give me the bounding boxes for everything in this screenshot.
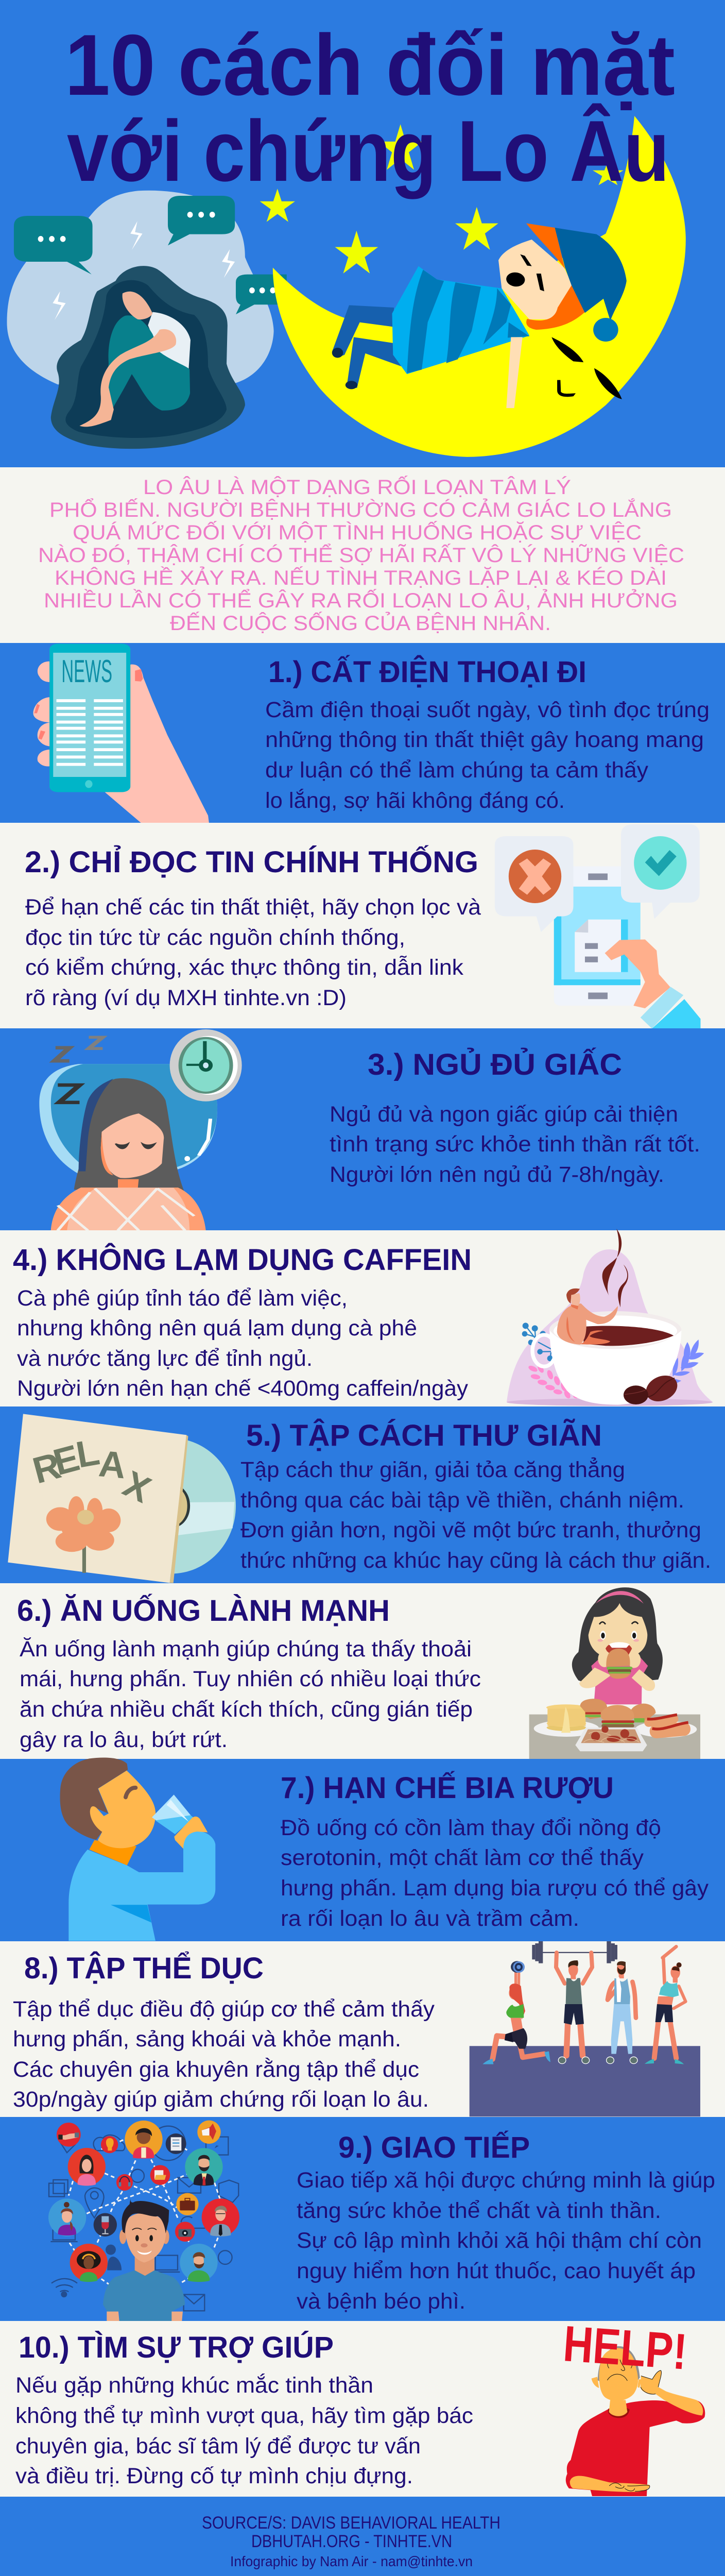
panel: footer sources [0, 2497, 725, 2576]
icon: relax album with disc [8, 1414, 236, 1583]
panel: introduction: PHỔ BIẾN. NGƯỜI BỆNH THƯỜNG CÓ CẢM GIÁC LO LẮNG [49, 497, 672, 521]
body text [15, 2373, 473, 2488]
body text: tăng sức khỏe thể chất và tinh thần. [297, 2198, 661, 2223]
icon: girl eating burgers [529, 1587, 700, 1759]
heading: 2.) CHỈ ĐỌC TIN CHÍNH THỐNG [25, 845, 478, 879]
body text: Tập thể dục điều độ giúp cơ thể cảm thấy [13, 1997, 435, 2022]
icon: relax album with disc: RELAX [28, 1431, 157, 1511]
body text [330, 1102, 700, 1187]
icon: man drinking water [60, 1757, 215, 1941]
illustration: anxious woman with speech bubbles [7, 191, 287, 449]
body text: Ngủ đủ và ngon giấc giúp cải thiện [330, 1102, 678, 1127]
body text: Tập cách thư giãn, giải tỏa căng thẳng [240, 1457, 625, 1482]
icon: man asking for help [562, 2315, 705, 2496]
icon: hand holding phone with news [33, 644, 209, 823]
body text [17, 1286, 468, 1401]
panel: introduction: LO ÂU LÀ MỘT DẠNG RỐI LOẠN TÂM LÝ [143, 475, 571, 499]
body text: không thể tự mình vượt qua, hãy tìm gặp bác [15, 2403, 473, 2428]
body text: nhưng không nên quá lạm dụng cà phê [17, 1316, 417, 1341]
text: sources: SOURCE/S: DAVIS BEHAVIORAL HEALTH [202, 2513, 500, 2533]
body text: Cà phê giúp tỉnh táo để làm việc, [17, 1286, 348, 1311]
body text: thông qua các bài tập về thiền, chánh niệm. [240, 1488, 684, 1513]
body text: Đồ uống có cồn làm thay đổi nồng độ [281, 1816, 661, 1840]
text: credit: Infographic by Nam Air - nam@tinhte.vn [230, 2553, 473, 2569]
panel: introduction: QUÁ MỨC ĐỐI VỚI MỘT TÌNH HUỐNG HOẶC SỰ VIỆC [73, 520, 642, 544]
body text: hưng phấn, sảng khoái và khỏe mạnh. [13, 2027, 401, 2052]
panel: tip 1 [0, 643, 725, 823]
panel: tip 3 [0, 1028, 725, 1230]
body text: Người lớn nên hạn chế <400mg caffein/ngày [17, 1376, 468, 1401]
title [65, 16, 675, 199]
body text: hưng phấn. Lạm dụng bia rượu có thể gây [281, 1876, 709, 1901]
panel: tip 10 [0, 2315, 725, 2497]
body text: nguy hiểm hơn hút thuốc, cao huyết áp [297, 2259, 696, 2283]
body text: những thông tin thất thiệt gây hoang mang [265, 727, 704, 752]
body text: gây ra lo âu, bứt rứt. [20, 1727, 228, 1752]
icon: network of people around a man [48, 2121, 239, 2321]
icon: sleeping woman with clock [39, 1029, 242, 1230]
body text: tình trạng sức khỏe tinh thần rất tốt. [330, 1132, 700, 1157]
text: source links: DBHUTAH.ORG - TINHTE.VN [251, 2532, 452, 2551]
body text: Các chuyên gia khuyên rằng tập thể dục [13, 2057, 419, 2082]
body text: Nếu gặp những khúc mắc tinh thần [15, 2373, 373, 2398]
body text: Để hạn chế các tin thất thiệt, hãy chọn lọc và [25, 895, 481, 920]
body text: và nước tăng lực để tỉnh ngủ. [17, 1346, 313, 1371]
panel: introduction: KHÔNG HỀ XẢY RA. NẾU TÌNH TRẠNG LẶP LẠI & KÉO DÀI [55, 566, 667, 589]
panel: introduction: ĐẾN CUỘC SỐNG CỦA BỆNH NHÂN. [170, 611, 551, 635]
heading: 8.) TẬP THỂ DỤC [24, 1952, 264, 1985]
body text: Giao tiếp xã hội được chứng minh là giúp [297, 2168, 715, 2193]
panel: tip 2 [0, 823, 725, 1028]
panel: tip 5 [0, 1406, 725, 1583]
body text: lo lắng, sợ hãi không đáng có. [265, 788, 565, 813]
body text: Đơn giản hơn, ngồi vẽ một bức tranh, thưởng [240, 1518, 701, 1543]
body text: và bệnh béo phì. [297, 2289, 465, 2314]
body text [240, 1457, 711, 1573]
body text: có kiểm chứng, xác thực thông tin, dẫn link [25, 955, 464, 980]
body text [281, 1816, 709, 1931]
body text: chuyên gia, bác sĩ tâm lý để được tư vấn [15, 2434, 421, 2459]
illustration: boy sleeping on a crescent moon [273, 116, 686, 457]
panel: tip 8 [0, 1941, 725, 2117]
panel: hero header [0, 0, 725, 467]
heading: 3.) NGỦ ĐỦ GIẤC [368, 1048, 622, 1081]
body text: dư luận có thể làm chúng ta cảm thấy [265, 758, 649, 783]
body text [25, 895, 481, 1010]
heading: 9.) GIAO TIẾP [338, 2131, 530, 2164]
heading: 7.) HẠN CHẾ BIA RƯỢU [281, 1771, 614, 1805]
title: 10 cách đối mặt [65, 16, 675, 113]
body text: Ăn uống lành mạnh giúp chúng ta thấy thoải [20, 1637, 472, 1662]
body text [265, 698, 710, 813]
body text: ăn chứa nhiều chất kích thích, cũng gián tiếp [20, 1697, 473, 1722]
body text: ra rối loạn lo âu và trầm cảm. [281, 1906, 579, 1931]
body text: Cầm điện thoại suốt ngày, vô tình đọc trúng [265, 698, 710, 722]
body text: 30p/ngày giúp giảm chứng rối loạn lo âu. [13, 2087, 429, 2112]
body text: mái, hưng phấn. Tuy nhiên có nhiều loại thức [20, 1667, 481, 1691]
icon: man asking for help: HELP! [562, 2315, 689, 2380]
panel: tip 7 [0, 1757, 725, 1941]
body text: đọc tin tức từ các nguồn chính thống, [25, 925, 405, 950]
body text: Sự cô lập mình khỏi xã hội thậm chí còn [297, 2228, 702, 2253]
body text: và điều trị. Đừng cố tự mình chịu đựng. [15, 2464, 413, 2488]
illustration: stars [260, 124, 624, 274]
icon: person in coffee cup [507, 1229, 713, 1406]
icon: hand holding phone with news: NEWS [61, 653, 112, 689]
body text: serotonin, một chất làm cơ thể thấy [281, 1845, 644, 1870]
body text: rõ ràng (ví dụ MXH tinhte.vn :D) [25, 986, 347, 1010]
icon: phone with true and false badges [495, 824, 700, 1028]
panel: introduction: NÀO ĐÓ, THẬM CHÍ CÓ THỂ SỢ HÃI RẤT VÔ LÝ NHỮNG VIỆC [38, 543, 684, 567]
icon: four people exercising [470, 1941, 700, 2116]
heading: 4.) KHÔNG LẠM DỤNG CAFFEIN [13, 1243, 472, 1277]
panel: introduction: NHIỀU LẦN CÓ THỂ GÂY RA RỐI LOẠN LO ÂU, ẢNH HƯỞNG [44, 588, 678, 612]
heading: 6.) ĂN UỐNG LÀNH MẠNH [17, 1594, 390, 1628]
panel: tip 4 [0, 1229, 725, 1406]
body text [13, 1997, 435, 2112]
body text: Người lớn nên ngủ đủ 7-8h/ngày. [330, 1162, 664, 1187]
body text [20, 1637, 481, 1752]
body text [297, 2168, 715, 2314]
panel: tip 9 [0, 2117, 725, 2321]
panel: tip 6 [0, 1583, 725, 1759]
body text: thức những ca khúc hay cũng là cách thư giãn. [240, 1548, 711, 1573]
heading: 5.) TẬP CÁCH THƯ GIÃN [246, 1419, 602, 1452]
panel: introduction [0, 467, 725, 643]
heading: 1.) CẤT ĐIỆN THOẠI ĐI [268, 655, 586, 689]
heading: 10.) TÌM SỰ TRỢ GIÚP [19, 2331, 334, 2364]
